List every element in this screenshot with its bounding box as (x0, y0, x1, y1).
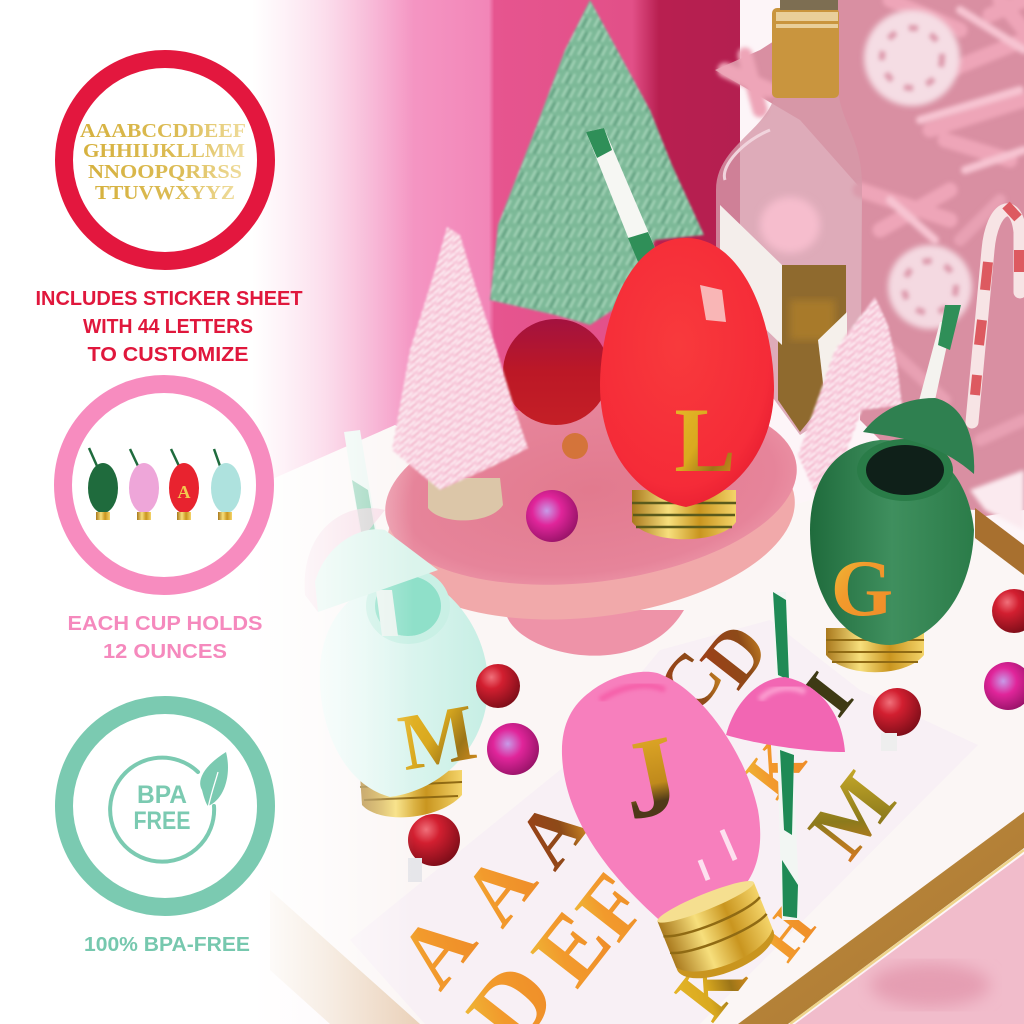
icon: BPA free leaf badge: BPA (137, 781, 187, 809)
sticker sheet: D (685, 608, 785, 702)
gold cup base (654, 875, 782, 990)
red cup with letter L: L (674, 389, 736, 491)
mint cup with letter M (305, 430, 488, 817)
table surface (270, 425, 1024, 1024)
sticker letters: AAABCCDDEEF (80, 121, 246, 142)
stand rim (376, 403, 806, 641)
four cups: A (178, 482, 190, 502)
cake stand (374, 373, 808, 656)
white fade over the left of the photo (0, 0, 450, 1024)
pink bottle-brush tree (392, 227, 528, 520)
sticker sheet: F (557, 856, 665, 957)
sticker letters: TTUVWXYYZ (95, 183, 235, 204)
teal ring (64, 705, 266, 907)
sticker sheet (350, 608, 978, 1024)
sticker sheet: E (512, 892, 630, 1003)
sticker letters: NNOOPQRRSS (88, 162, 242, 183)
sticker caption: WITH 44 LETTERS (83, 315, 253, 338)
table ornaments (408, 589, 1024, 882)
red ring (64, 59, 266, 261)
BPA caption: 100% BPA-FREE (84, 934, 250, 956)
four cups (88, 448, 241, 520)
green cup with letter G: G (831, 545, 893, 633)
red cup with letter L (586, 128, 774, 539)
cup size caption: EACH CUP HOLDS (68, 613, 262, 635)
sticker sheet: A (444, 837, 555, 942)
stand foot (505, 610, 684, 656)
icon: BPA free leaf badge: FREE (134, 807, 190, 835)
pink cup lid with straw (726, 592, 845, 920)
sticker sheet: A (500, 784, 605, 884)
sticker caption: INCLUDES STICKER SHEET (36, 287, 303, 310)
cup size caption: 12 OUNCES (103, 641, 227, 663)
red glitter ornament (503, 319, 609, 459)
pink cup body (562, 672, 760, 925)
sticker sheet: M (791, 755, 913, 875)
snowflakes (864, 10, 972, 329)
pink cup with letter J (562, 672, 782, 990)
wine bottle (716, 0, 862, 435)
small pink tree right (798, 297, 902, 515)
sticker sheet: C (640, 636, 740, 730)
sticker sheet: A (380, 895, 495, 1005)
panel: cup size (63, 384, 265, 663)
sticker sheet: I (788, 658, 868, 730)
panel: sticker sheet (36, 59, 303, 366)
pink cup with letter J: J (609, 712, 690, 845)
sticker sheet: K (731, 726, 820, 811)
red cup straw (586, 128, 656, 262)
pink ring (63, 384, 265, 586)
candy cane (972, 205, 1020, 422)
sticker caption (36, 287, 303, 366)
magenta ornament on stand (526, 490, 578, 542)
sticker letters (80, 121, 246, 204)
green cup with letter G (810, 305, 974, 672)
mint cup with letter M: M (393, 688, 482, 788)
sticker sheet: H (745, 893, 828, 973)
pink christmas tree (715, 0, 1024, 530)
mint cup body (320, 572, 488, 797)
gold tray edge (738, 812, 1024, 1024)
blurred floor (795, 854, 1024, 1024)
cup size caption (68, 613, 262, 663)
sheet paper (350, 620, 978, 1024)
sticker letters: GHHIIJKLLMM (83, 141, 245, 162)
green bottle-brush tree (490, 0, 704, 325)
sticker caption: TO CUSTOMIZE (88, 343, 248, 366)
stand top (374, 373, 808, 607)
panel: BPA free (64, 705, 266, 956)
icon: BPA free leaf badge (110, 752, 228, 862)
